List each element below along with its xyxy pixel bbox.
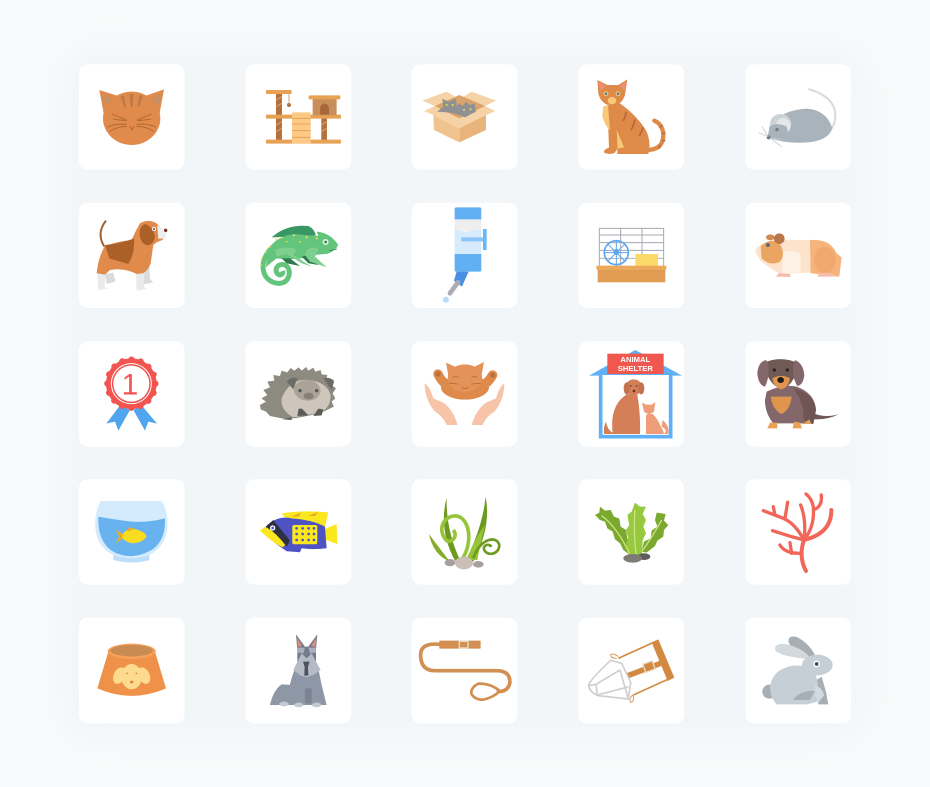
card: animal shelter (578, 341, 684, 447)
card: kittens in box (411, 64, 518, 170)
card: mouse (745, 64, 852, 170)
icon: beagle (97, 221, 167, 291)
card: chameleon (245, 202, 352, 308)
card: leash (411, 617, 518, 724)
card: hamster cage (578, 202, 684, 308)
card: guinea pig (745, 202, 852, 308)
card: cat in hands (411, 341, 518, 447)
card: hedgehog (245, 341, 352, 447)
icon: rabbit (762, 636, 833, 704)
icon: muzzle (589, 639, 674, 702)
card: cat face (78, 64, 185, 170)
icon: mouse (759, 89, 835, 147)
card: orange cat (578, 64, 684, 170)
card: aquarium plant (411, 479, 518, 585)
icon: chameleon (260, 226, 338, 283)
card: seaweed (578, 479, 684, 585)
card: rabbit (745, 617, 852, 724)
icon: animal shelter (589, 350, 682, 437)
card: water bottle (411, 202, 518, 308)
card: cat tree (245, 64, 352, 170)
icon: cat tree (266, 90, 341, 144)
icon: first place rosette: 1 (122, 369, 138, 402)
card: tropical fish (245, 479, 352, 585)
icon: orange cat (597, 79, 665, 154)
card: dachshund (745, 341, 852, 447)
icon: fishbowl (95, 501, 167, 562)
icon: red coral (763, 494, 831, 571)
card: schnauzer (245, 617, 352, 724)
icon: hedgehog (260, 367, 336, 420)
icon: animal shelter: ANIMAL (620, 355, 651, 364)
icon: water bottle (443, 207, 487, 303)
icon: hamster cage (596, 228, 666, 282)
icon: dog bowl (97, 644, 166, 696)
icon: dachshund (757, 359, 839, 428)
card: dog bowl (78, 617, 185, 724)
icon: leash (421, 641, 510, 700)
icon: aquarium plant (429, 497, 499, 569)
card: rosette (78, 341, 185, 447)
icon: schnauzer (270, 634, 327, 707)
card: red coral (745, 479, 852, 585)
icon: cat in hands (425, 362, 504, 425)
icon: cat face (99, 89, 164, 145)
icon: tropical fish (260, 511, 337, 552)
icon: seaweed (595, 503, 668, 563)
icon: guinea pig (755, 233, 842, 277)
card: fishbowl (78, 479, 185, 585)
card: muzzle (578, 617, 684, 724)
icon: animal shelter: SHELTER (618, 364, 653, 373)
icon: kittens in box (422, 92, 496, 142)
card: beagle (78, 202, 185, 308)
